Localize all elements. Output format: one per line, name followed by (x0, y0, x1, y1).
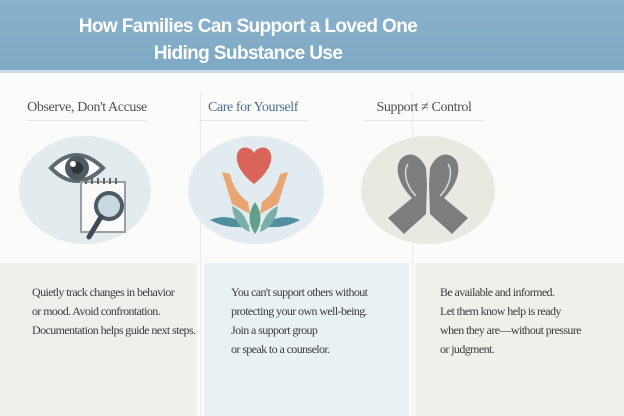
panel: support text: Be available and informed. (440, 285, 554, 299)
panel: observe text: Documentation helps guide next steps. (32, 323, 195, 337)
panel: observe text: Quietly track changes in behavior (32, 285, 174, 299)
header banner (0, 0, 624, 73)
panel: care text: or speak to a counselor. (231, 342, 330, 356)
heading: support (364, 100, 484, 121)
icon: heart hands (361, 136, 495, 244)
icon: heart hands lotus (188, 136, 324, 244)
panel: support text: when they are—without pressure (440, 323, 581, 337)
heading: observe: Observe, Don't Accuse (27, 100, 147, 115)
panel: observe text (0, 263, 197, 416)
heading: support: Support ≠ Control (376, 100, 472, 115)
panel: care text: You can't support others without (231, 285, 367, 299)
panel: care text: protecting your own well-being. (231, 304, 367, 318)
heading: care (198, 100, 308, 121)
icon: eye and notepad (19, 136, 151, 244)
title (79, 16, 418, 64)
heading: care: Care for Yourself (208, 100, 298, 115)
panel: care text (204, 263, 409, 416)
panel: support text: or judgment. (440, 342, 494, 356)
panel: observe text: or mood. Avoid confrontation. (32, 304, 160, 318)
panel: support text (415, 263, 624, 416)
title: How Families Can Support a Loved One (79, 16, 417, 37)
panel: care text: Join a support group (231, 323, 317, 337)
panel: support text: Let them know help is ready (440, 304, 561, 318)
title: Hiding Substance Use (154, 43, 342, 64)
